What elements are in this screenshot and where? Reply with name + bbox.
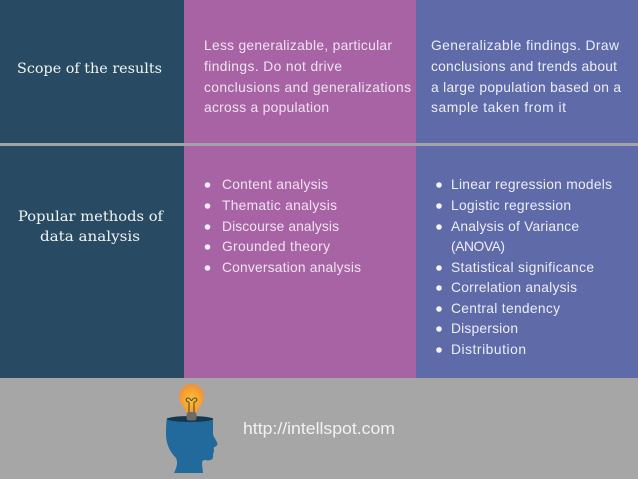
text block: quantitative scope: conclusions and trends about [431, 59, 617, 74]
heading: scope of the results: Scope of the results [17, 61, 162, 77]
text block: quantitative scope: sample taken from it [431, 100, 566, 115]
panel: quantitative column [416, 0, 638, 378]
heading: popular methods of data analysis: data analysis [40, 229, 140, 245]
text block: qualitative scope: conclusions and generalizations [204, 80, 411, 95]
text block: qualitative scope [204, 38, 411, 115]
list: quantitative methods: Logistic regression [451, 198, 571, 213]
list: qualitative methods: Thematic analysis [222, 198, 337, 213]
list: quantitative methods: Linear regression models [451, 177, 612, 192]
heading: popular methods of data analysis: Popular methods of [18, 209, 164, 225]
text block: qualitative scope: Less generalizable, particular [204, 38, 392, 53]
panel: row headings column [0, 0, 184, 378]
text block: qualitative scope: across a population [204, 100, 329, 115]
list: qualitative methods: Discourse analysis [222, 219, 339, 234]
text block: quantitative scope: a large population based on a [431, 80, 621, 95]
list: quantitative methods: Central tendency [451, 301, 560, 316]
list: quantitative methods: Distribution [451, 342, 526, 357]
text block: quantitative scope [431, 38, 621, 115]
link text: http://intellspot.com [243, 419, 395, 438]
list: quantitative methods: Statistical significance [451, 260, 594, 275]
text block: quantitative scope: Generalizable findings. Draw [431, 38, 619, 53]
list: quantitative methods: Dispersion [451, 321, 518, 336]
panel: footer band [0, 378, 638, 479]
panel: qualitative column [184, 0, 416, 378]
icon: head with light bulb [166, 384, 218, 473]
text block: qualitative scope: findings. Do not drive [204, 59, 342, 74]
list: qualitative methods: Conversation analysis [222, 260, 361, 275]
list: quantitative methods: Correlation analysis [451, 280, 577, 295]
list: quantitative methods: (ANOVA) [451, 239, 505, 254]
list: quantitative methods [436, 177, 612, 357]
list: qualitative methods: Grounded theory [222, 239, 330, 254]
heading: popular methods of data analysis [18, 209, 164, 245]
list: quantitative methods: Analysis of Variance [451, 219, 579, 234]
list: qualitative methods [205, 177, 361, 275]
list: qualitative methods: Content analysis [222, 177, 328, 192]
